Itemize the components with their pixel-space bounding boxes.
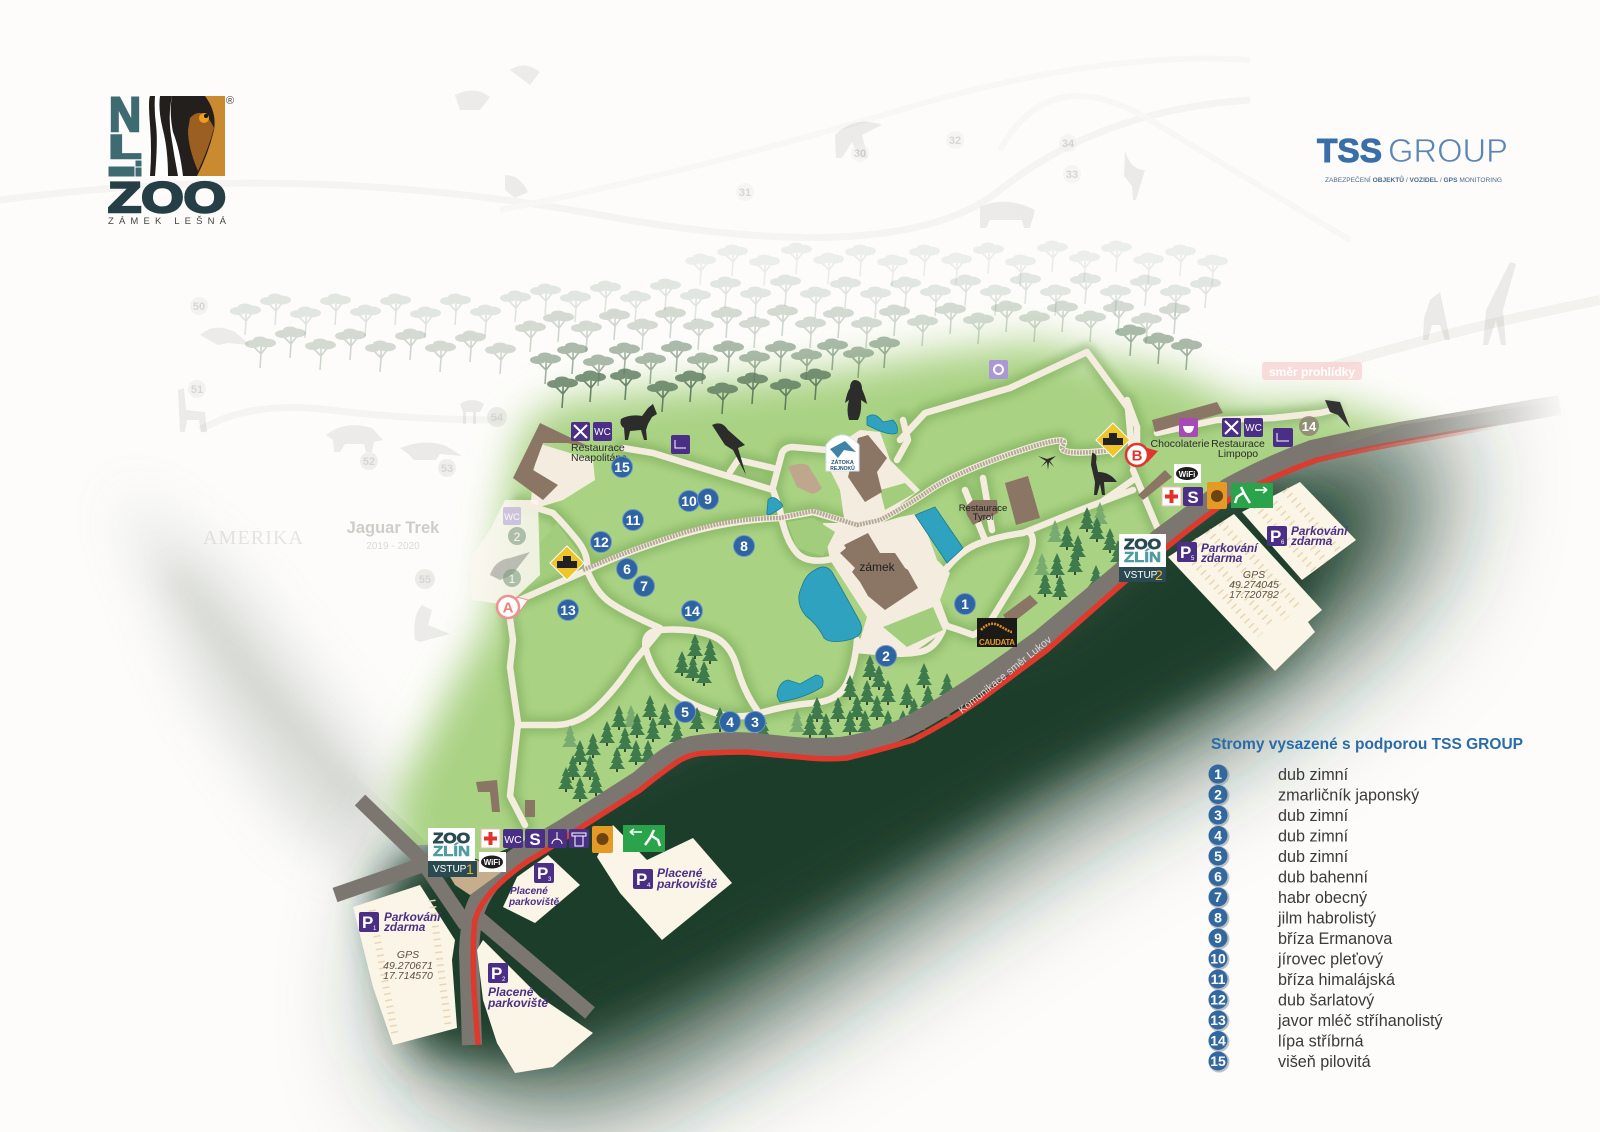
service icons at entrance 2: S xyxy=(1187,488,1199,507)
legend tree names: bříza Ermanova xyxy=(1278,930,1392,948)
restaurant Neapolitána xyxy=(571,422,627,464)
faded upper map: roads and animals xyxy=(0,59,1600,642)
Chocolaterie and restaurant Limpopo: Limpopo xyxy=(1218,448,1258,460)
tree markers on the map: 12 xyxy=(593,534,609,550)
parking P3 label xyxy=(508,863,559,908)
parking P1 label: P xyxy=(362,913,373,932)
tree markers on the map: 15 xyxy=(614,459,630,475)
pin B: B xyxy=(1132,448,1143,464)
savanna tree rows xyxy=(230,240,1228,414)
legend markers: 2 xyxy=(1214,786,1222,802)
sand enclosure xyxy=(788,464,822,493)
tree markers on the map: 14 xyxy=(684,603,700,619)
legend markers: 8 xyxy=(1214,910,1222,926)
parking P5 label: P xyxy=(1180,543,1191,562)
parking P4 label: Placené xyxy=(657,866,703,880)
legend markers: 15 xyxy=(1210,1053,1226,1069)
parking P6 label: 6 xyxy=(1281,540,1285,546)
legend markers: 1 xyxy=(1214,766,1222,782)
entrance sign: Vstup 1 xyxy=(428,828,477,877)
faded numbered stops: 55 xyxy=(419,574,431,586)
service icons at entrance 2: WiFi xyxy=(1179,470,1195,479)
parking lots xyxy=(353,482,1356,1073)
tree markers on the map: 4 xyxy=(726,714,734,730)
faded zone label: Amerika: AMERIKA xyxy=(203,527,304,549)
tree markers on the map: 8 xyxy=(740,538,748,554)
service icons at entrance 2 xyxy=(1162,464,1273,509)
parking P3 label: Placené xyxy=(510,886,548,897)
animal silhouettes xyxy=(620,380,1117,495)
parking P6 label: P xyxy=(1270,527,1281,546)
legend markers: 13 xyxy=(1210,1012,1226,1028)
tree markers on the map: 6 xyxy=(623,561,631,577)
logo: TSS Group xyxy=(1317,132,1508,184)
parking P1 label: 1 xyxy=(373,926,377,932)
faded WC and stops near entrance A xyxy=(503,507,526,587)
tree markers on the map xyxy=(558,456,976,732)
railway line xyxy=(583,440,1113,570)
Chocolaterie and restaurant Limpopo: 14 xyxy=(1302,419,1317,434)
parking P1 label: GPS xyxy=(397,949,419,961)
legend tree names: zmarličník japonský xyxy=(1278,786,1420,804)
legend tree names: jilm habrolistý xyxy=(1277,910,1377,928)
parking P2 label xyxy=(487,963,548,1010)
crane xyxy=(1091,453,1117,495)
parking P3 label: P xyxy=(537,864,548,883)
legend tree names: bříza himalájská xyxy=(1278,971,1395,989)
conifer groups xyxy=(558,502,1126,802)
logo: TSS Group: ZABEZPEČENÍ OBJEKTŮ / VOZIDEL / GPS MONITORING xyxy=(1325,174,1502,184)
parking P6 label xyxy=(1267,524,1349,548)
entrance sign: Vstup 2 xyxy=(1119,534,1166,583)
pin A: A xyxy=(503,600,514,616)
faded route label xyxy=(1262,362,1362,380)
tree markers on the map: 2 xyxy=(882,648,890,664)
parking P5 label: 5 xyxy=(1191,556,1195,562)
legend markers: 6 xyxy=(1214,868,1222,884)
faded numbered stops: 51 xyxy=(191,384,203,396)
restaurant Tyrol label: Restaurace xyxy=(959,503,1007,514)
faded numbered stops: 50 xyxy=(193,301,205,313)
faded WC and stops near entrance A: 2 xyxy=(514,530,521,544)
legend markers: 3 xyxy=(1214,807,1222,823)
parking P4 label: P xyxy=(636,870,647,889)
parking P5 label: 17.720782 xyxy=(1229,589,1279,601)
buildings xyxy=(476,402,1223,817)
parking P3 label: 3 xyxy=(548,877,552,883)
legend markers: 4 xyxy=(1214,828,1222,844)
legend markers: 7 xyxy=(1214,889,1222,905)
sign: Zátoka rejnoků xyxy=(826,435,859,472)
Chocolaterie and restaurant Limpopo xyxy=(1151,416,1319,460)
tree markers on the map: 3 xyxy=(751,714,759,730)
parking P5 label: Parkování xyxy=(1201,541,1259,555)
ponds xyxy=(767,415,963,702)
legend tree names: javor mléč stříhanolistý xyxy=(1277,1012,1444,1030)
parking P4 label xyxy=(633,866,717,891)
legend markers: 12 xyxy=(1210,992,1226,1008)
faded label: Jaguar Trek xyxy=(347,519,440,552)
park paths xyxy=(508,352,1333,825)
hornbill silhouette by stop 14 xyxy=(1325,400,1350,428)
entrance sign: Vstup 2: 2 xyxy=(1155,567,1163,583)
dark green surroundings xyxy=(375,420,1440,1100)
faded animals xyxy=(178,65,1516,642)
legend markers: 11 xyxy=(1211,971,1226,987)
sign: Caudata xyxy=(977,618,1017,647)
parking P5 label: zdarma xyxy=(1200,551,1243,565)
entrance sign: Vstup 1: ZLÍN xyxy=(433,843,470,860)
tree markers on the map: 7 xyxy=(640,578,648,594)
restaurant Tyrol label: Tyrol xyxy=(973,512,993,523)
legend tree names: višeň pilovitá xyxy=(1278,1053,1371,1071)
parking P5 label: GPS xyxy=(1243,569,1265,581)
entrance sign: Vstup 1: 1 xyxy=(466,861,474,877)
restaurant Tyrol label xyxy=(959,503,1007,523)
parking P1 label: zdarma xyxy=(383,920,426,934)
parking P4 label: parkoviště xyxy=(656,877,717,891)
faded road running up-left xyxy=(170,570,365,805)
legend tree names: dub šarlatový xyxy=(1278,992,1375,1010)
tree markers on the map: 9 xyxy=(704,491,712,507)
legend tree names: habr obecný xyxy=(1278,889,1368,907)
legend tree names: dub bahenní xyxy=(1278,868,1369,886)
parking P2 label: parkoviště xyxy=(487,996,548,1010)
legend tree names: dub zimní xyxy=(1278,828,1349,846)
parking P6 label: zdarma xyxy=(1290,534,1333,548)
legend tree names: dub zimní xyxy=(1278,848,1349,866)
pin A xyxy=(497,596,528,618)
tree markers on the map: 10 xyxy=(681,493,697,509)
legend tree names xyxy=(1277,766,1444,1071)
red road line xyxy=(473,425,1500,1045)
legend markers xyxy=(1208,764,1230,1072)
penguin xyxy=(845,380,867,420)
rest bench icon xyxy=(671,435,690,454)
service icons at entrance 1: S xyxy=(529,830,541,849)
workshop icon xyxy=(989,360,1008,379)
legend markers: 9 xyxy=(1214,930,1222,946)
legend markers: 14 xyxy=(1210,1032,1226,1048)
castle label: zámek xyxy=(859,560,896,574)
service icons at entrance 1: WiFi xyxy=(484,858,500,867)
tree markers on the map: 5 xyxy=(681,704,689,720)
parking stripes xyxy=(372,490,1340,1035)
restaurant Neapolitána: Restaurace xyxy=(571,442,625,454)
entrance sign: Vstup 1: ZOO xyxy=(433,830,470,847)
tree markers on the map: 13 xyxy=(560,602,576,618)
logo letters NLI: L xyxy=(109,129,141,165)
legend tree names: dub zimní xyxy=(1278,766,1349,784)
logo tiger eye xyxy=(149,96,225,176)
entrance sign: Vstup 2: VSTUP xyxy=(1124,570,1158,581)
parking P1 label: 17.714570 xyxy=(383,970,433,982)
entrance sign: Vstup 2: ZLÍN xyxy=(1124,549,1161,566)
pin B xyxy=(1126,444,1158,466)
road label: Komunikace směr Lukov xyxy=(956,634,1055,716)
entrance sign: Vstup 2: ZOO xyxy=(1124,536,1161,553)
faded WC and stops near entrance A: 1 xyxy=(509,572,516,586)
logo letters NLI: N xyxy=(109,89,141,142)
faded WC and stops near entrance A: WC xyxy=(504,512,520,523)
sign: Zátoka rejnoků: REJNOKŮ xyxy=(830,464,855,472)
faded numbered stops xyxy=(188,131,1081,589)
faded numbered stops: 52 xyxy=(363,456,375,468)
train stop sign east xyxy=(1096,423,1130,457)
parking P1 label: 49.270671 xyxy=(383,960,433,972)
faded otter by entrance A xyxy=(490,552,530,580)
roads xyxy=(335,405,1560,1045)
faded numbered stops: 34 xyxy=(1062,138,1075,150)
legend tree names: jírovec pleťový xyxy=(1277,950,1384,968)
parking P3 label: parkoviště xyxy=(508,897,559,908)
faded label: Jaguar Trek: Jaguar Trek xyxy=(347,519,440,537)
entrance sign: Vstup 1: VSTUP xyxy=(433,864,467,875)
restaurant Neapolitána: WC xyxy=(594,427,611,438)
parrot xyxy=(712,423,746,475)
green park ground xyxy=(373,317,1438,860)
parking P1 label: Parkování xyxy=(384,910,442,924)
park plazas xyxy=(470,430,950,653)
entrance forecourt xyxy=(440,860,507,895)
parking P2 label: P xyxy=(491,964,502,983)
parking P6 label: Parkování xyxy=(1291,524,1349,538)
grey fade band on the left xyxy=(120,490,400,860)
registered mark: ® xyxy=(226,95,234,107)
lawn shading along paths xyxy=(508,352,1333,825)
faded numbered stops: 54 xyxy=(491,412,504,424)
logo letters NLI xyxy=(109,89,141,176)
lawn islands xyxy=(540,483,943,647)
logo word ZOO: ZOO xyxy=(108,174,226,222)
tree markers on the map: 1 xyxy=(961,596,969,612)
legend: trees planted with TSS GROUP xyxy=(1208,736,1523,1072)
parking P4 label: 4 xyxy=(647,883,651,889)
restaurant Neapolitána: Neapolitána xyxy=(571,452,627,464)
service icons at entrance 1: WC xyxy=(504,834,522,846)
service icons at entrance 1 xyxy=(479,825,665,872)
legend markers: 10 xyxy=(1210,950,1226,966)
logo: TSS Group: GROUP xyxy=(1388,132,1508,169)
sign: Zátoka rejnoků: ZÁTOKA xyxy=(831,459,854,466)
palm fan icon xyxy=(1038,456,1056,470)
train stop sign west xyxy=(550,546,584,580)
faded label: Jaguar Trek: 2019 - 2020 xyxy=(366,541,420,552)
donkey xyxy=(620,404,657,440)
faded numbered stops: 32 xyxy=(949,135,961,147)
logo: Zoo Zlín xyxy=(108,89,234,227)
tree markers on the map: 11 xyxy=(626,512,641,528)
parking P2 label: 2 xyxy=(502,977,506,983)
faded route label: směr prohlídky xyxy=(1269,365,1355,379)
parking P1 label xyxy=(359,910,442,982)
legend title: Stromy vysazené s podporou TSS GROUP xyxy=(1211,736,1523,753)
parking P5 label xyxy=(1177,541,1279,601)
parking P5 label: 49.274045 xyxy=(1229,579,1279,591)
Chocolaterie and restaurant Limpopo: WC xyxy=(1245,423,1262,434)
logo tagline: ZÁMEK LEŠNÁ xyxy=(108,216,227,227)
sign: Caudata: CAUDATA xyxy=(979,638,1015,647)
faded numbered stops: 53 xyxy=(441,463,453,475)
legend tree names: lípa stříbrná xyxy=(1278,1032,1363,1050)
legend markers: 5 xyxy=(1214,848,1222,864)
Chocolaterie and restaurant Limpopo: Restaurace xyxy=(1211,438,1265,450)
faded numbered stops: 33 xyxy=(1066,169,1078,181)
faded numbered stops: 31 xyxy=(739,187,751,199)
parking P2 label: Placené xyxy=(488,985,534,999)
faded numbered stops: 30 xyxy=(854,148,866,160)
Chocolaterie and restaurant Limpopo: Chocolaterie xyxy=(1151,438,1210,450)
legend tree names: dub zimní xyxy=(1278,807,1349,825)
logo: TSS Group: TSS xyxy=(1317,132,1382,169)
